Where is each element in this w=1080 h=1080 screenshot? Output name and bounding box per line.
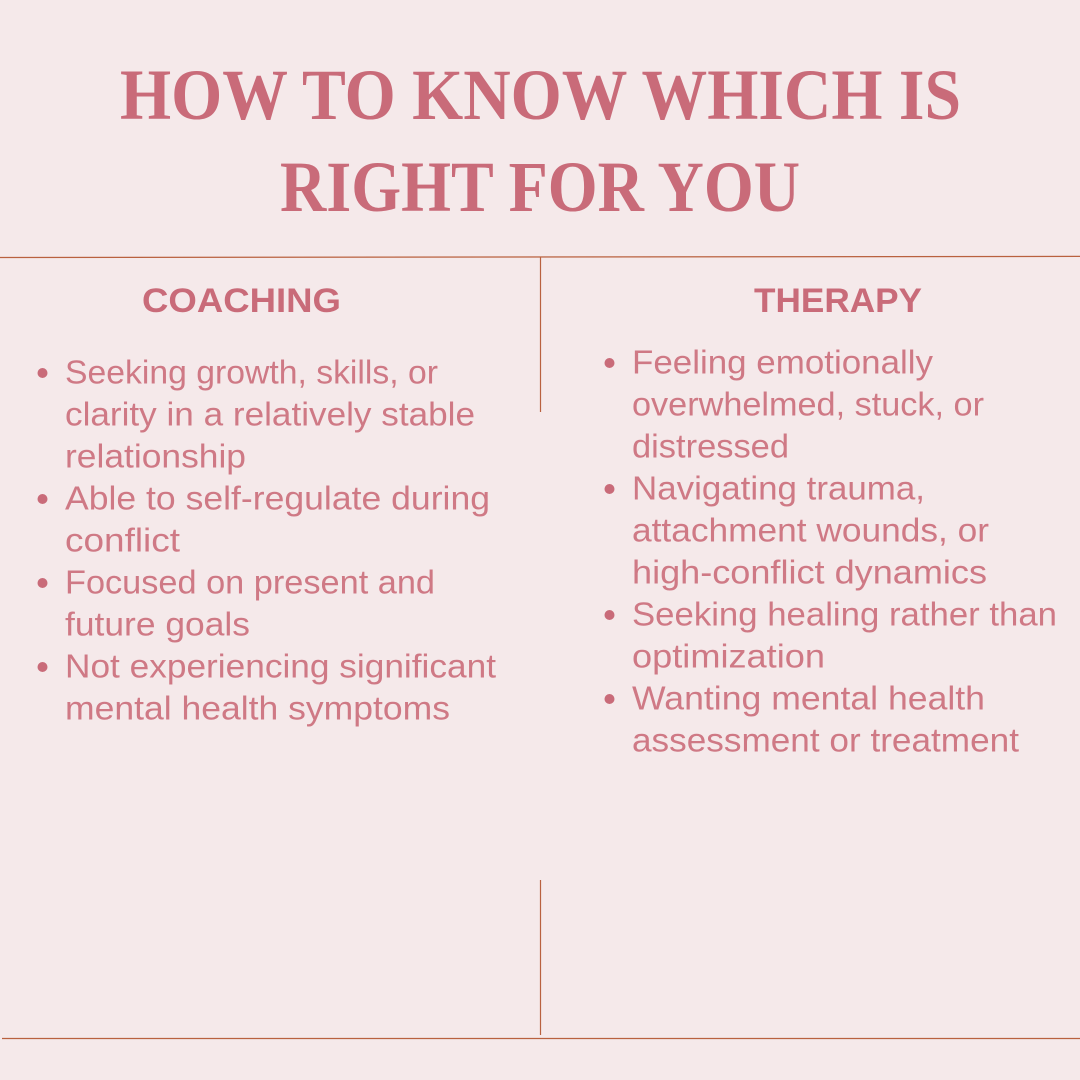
list: therapy points: distressed xyxy=(632,428,789,465)
list: coaching points: Focused on present and xyxy=(65,564,435,601)
panel: therapy xyxy=(604,282,1057,759)
list: coaching points: relationship xyxy=(65,438,246,475)
list: therapy points: overwhelmed, stuck, or xyxy=(632,386,984,423)
list: coaching points: conflict xyxy=(65,522,180,559)
list: therapy points: Navigating trauma, xyxy=(632,470,925,507)
title: HOW TO KNOW WHICH IS xyxy=(120,55,961,135)
list: therapy points: high-conflict dynamics xyxy=(632,554,987,591)
list: coaching points: future goals xyxy=(65,606,250,643)
list: therapy points: Feeling emotionally xyxy=(632,344,934,381)
list: therapy points: attachment wounds, or xyxy=(632,512,989,549)
list: coaching points: Seeking growth, skills, or xyxy=(65,354,438,391)
list: coaching points: clarity in a relatively stable xyxy=(65,396,475,433)
heading: therapy: THERAPY xyxy=(754,282,922,320)
title: RIGHT FOR YOU xyxy=(280,147,800,227)
list: therapy points: Seeking healing rather than xyxy=(632,596,1057,633)
list: coaching points: Able to self-regulate during xyxy=(65,480,490,517)
list: coaching points: Not experiencing significant xyxy=(65,648,496,685)
list: therapy points: optimization xyxy=(632,638,825,675)
list: coaching points: mental health symptoms xyxy=(65,690,450,727)
list: therapy points: Wanting mental health xyxy=(632,680,985,717)
title xyxy=(120,55,961,227)
list: therapy points: assessment or treatment xyxy=(632,722,1019,759)
list: therapy points xyxy=(604,344,1057,759)
list: coaching points xyxy=(38,354,496,727)
panel: coaching xyxy=(38,282,496,727)
heading: coaching: COACHING xyxy=(142,282,341,320)
